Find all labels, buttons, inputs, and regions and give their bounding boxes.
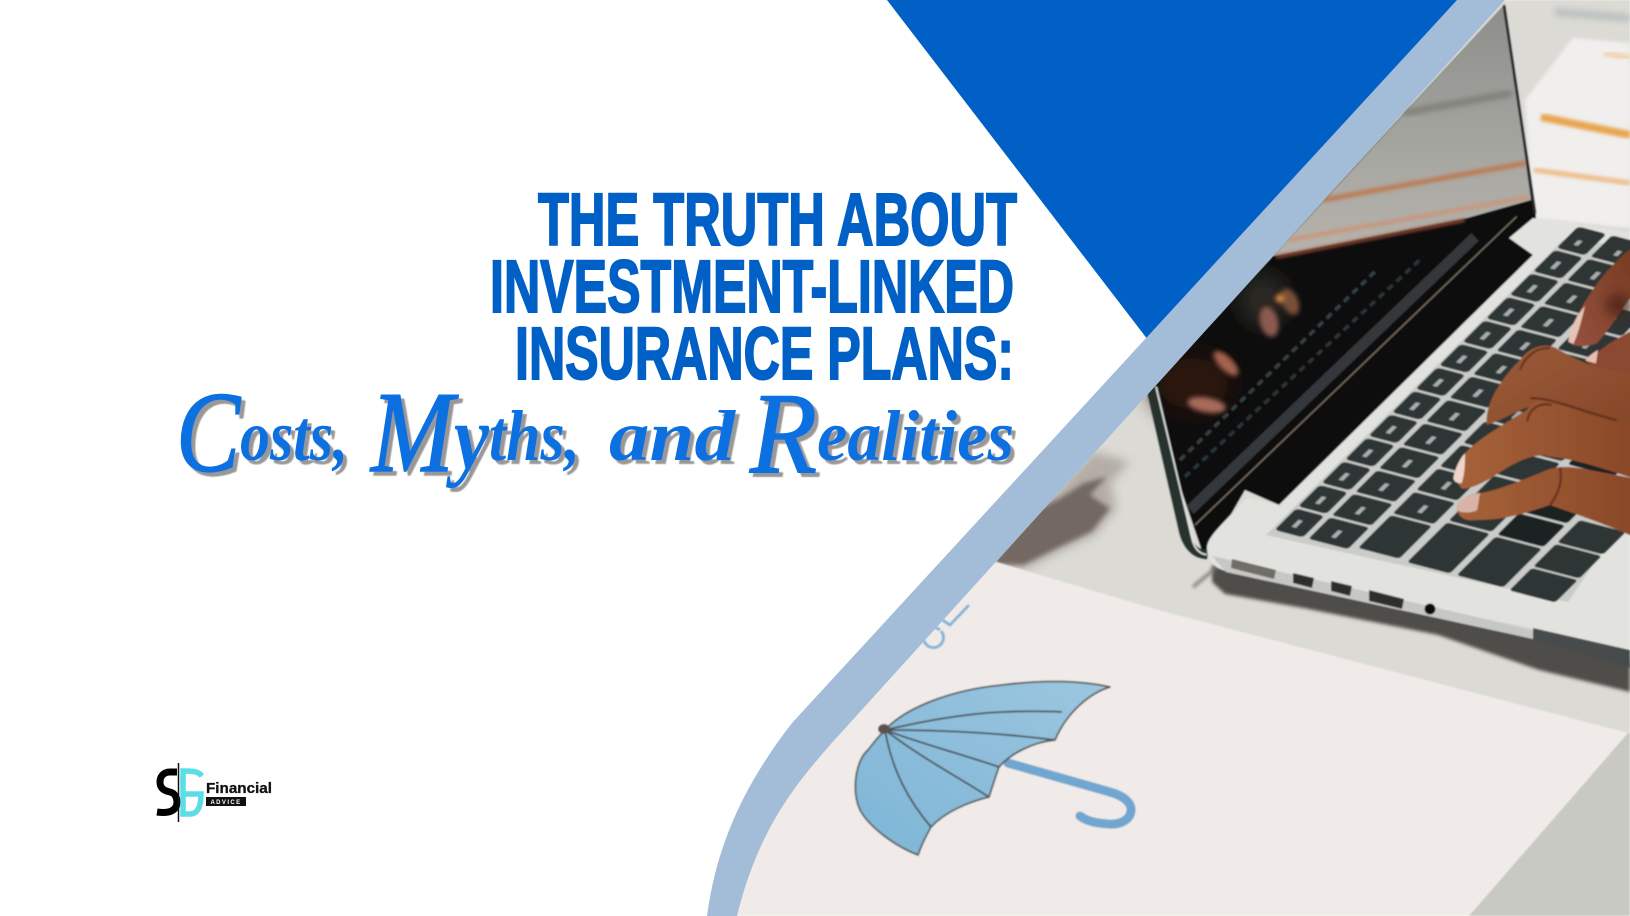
logo: SG Financial Advice	[157, 763, 272, 822]
title: three bold lines: INVESTMENT-LINKED	[490, 245, 1014, 328]
subtitle: script line: and	[609, 396, 736, 476]
thumb-side finger	[1457, 467, 1630, 537]
fingernails	[1453, 453, 1465, 483]
panel: laptop photo	[700, 0, 1630, 916]
second finger	[1587, 330, 1630, 373]
title: three bold lines: THE TRUTH ABOUT	[538, 178, 1017, 261]
laptop base	[1207, 218, 1630, 668]
logo wordmark: Financial	[206, 780, 272, 797]
knuckle creases	[1520, 348, 1617, 505]
icon: blue umbrella	[855, 681, 1131, 855]
subtitle: script line: ths,	[489, 396, 580, 476]
background document	[1525, 8, 1630, 228]
index finger	[1455, 399, 1630, 489]
laptop ports	[1231, 559, 1436, 614]
table surface	[1005, 0, 1630, 734]
logo S mark	[157, 772, 177, 813]
subtitle: script line: M	[369, 369, 459, 497]
logo tag text: ADVICE	[210, 800, 242, 806]
screen reflection details	[1147, 217, 1517, 559]
subtitle: script line: y	[445, 386, 490, 488]
logo G mark	[183, 771, 202, 814]
subtitle: script line: ealities	[817, 396, 1014, 476]
title: three bold lines	[490, 178, 1017, 395]
keyboard keys	[1274, 226, 1630, 603]
laptop screen	[1147, 5, 1536, 560]
dark smudge on table	[980, 452, 1130, 570]
subtitle: script line: R	[749, 370, 817, 498]
partial blue drawing on paper	[922, 604, 970, 650]
key legends	[1294, 241, 1630, 550]
blue triangle	[887, 0, 1458, 340]
hand body and middle finger	[1487, 346, 1630, 433]
table scuff near laptop	[1193, 567, 1217, 587]
subtitle: script line: osts,	[240, 396, 348, 476]
logo divider	[178, 763, 180, 822]
laptop shadow	[1212, 565, 1630, 692]
subtitle: script line	[176, 369, 1014, 498]
light blue curved band	[707, 0, 1505, 916]
grey table corner	[1469, 733, 1630, 916]
title: three bold lines: INSURANCE PLANS:	[515, 312, 1014, 395]
hands typing	[1453, 247, 1630, 537]
keyboard well	[1266, 240, 1630, 602]
subtitle: script line: C	[176, 369, 242, 497]
white paper sheet	[700, 560, 1628, 916]
top finger	[1568, 247, 1630, 346]
logo tag	[206, 797, 246, 806]
